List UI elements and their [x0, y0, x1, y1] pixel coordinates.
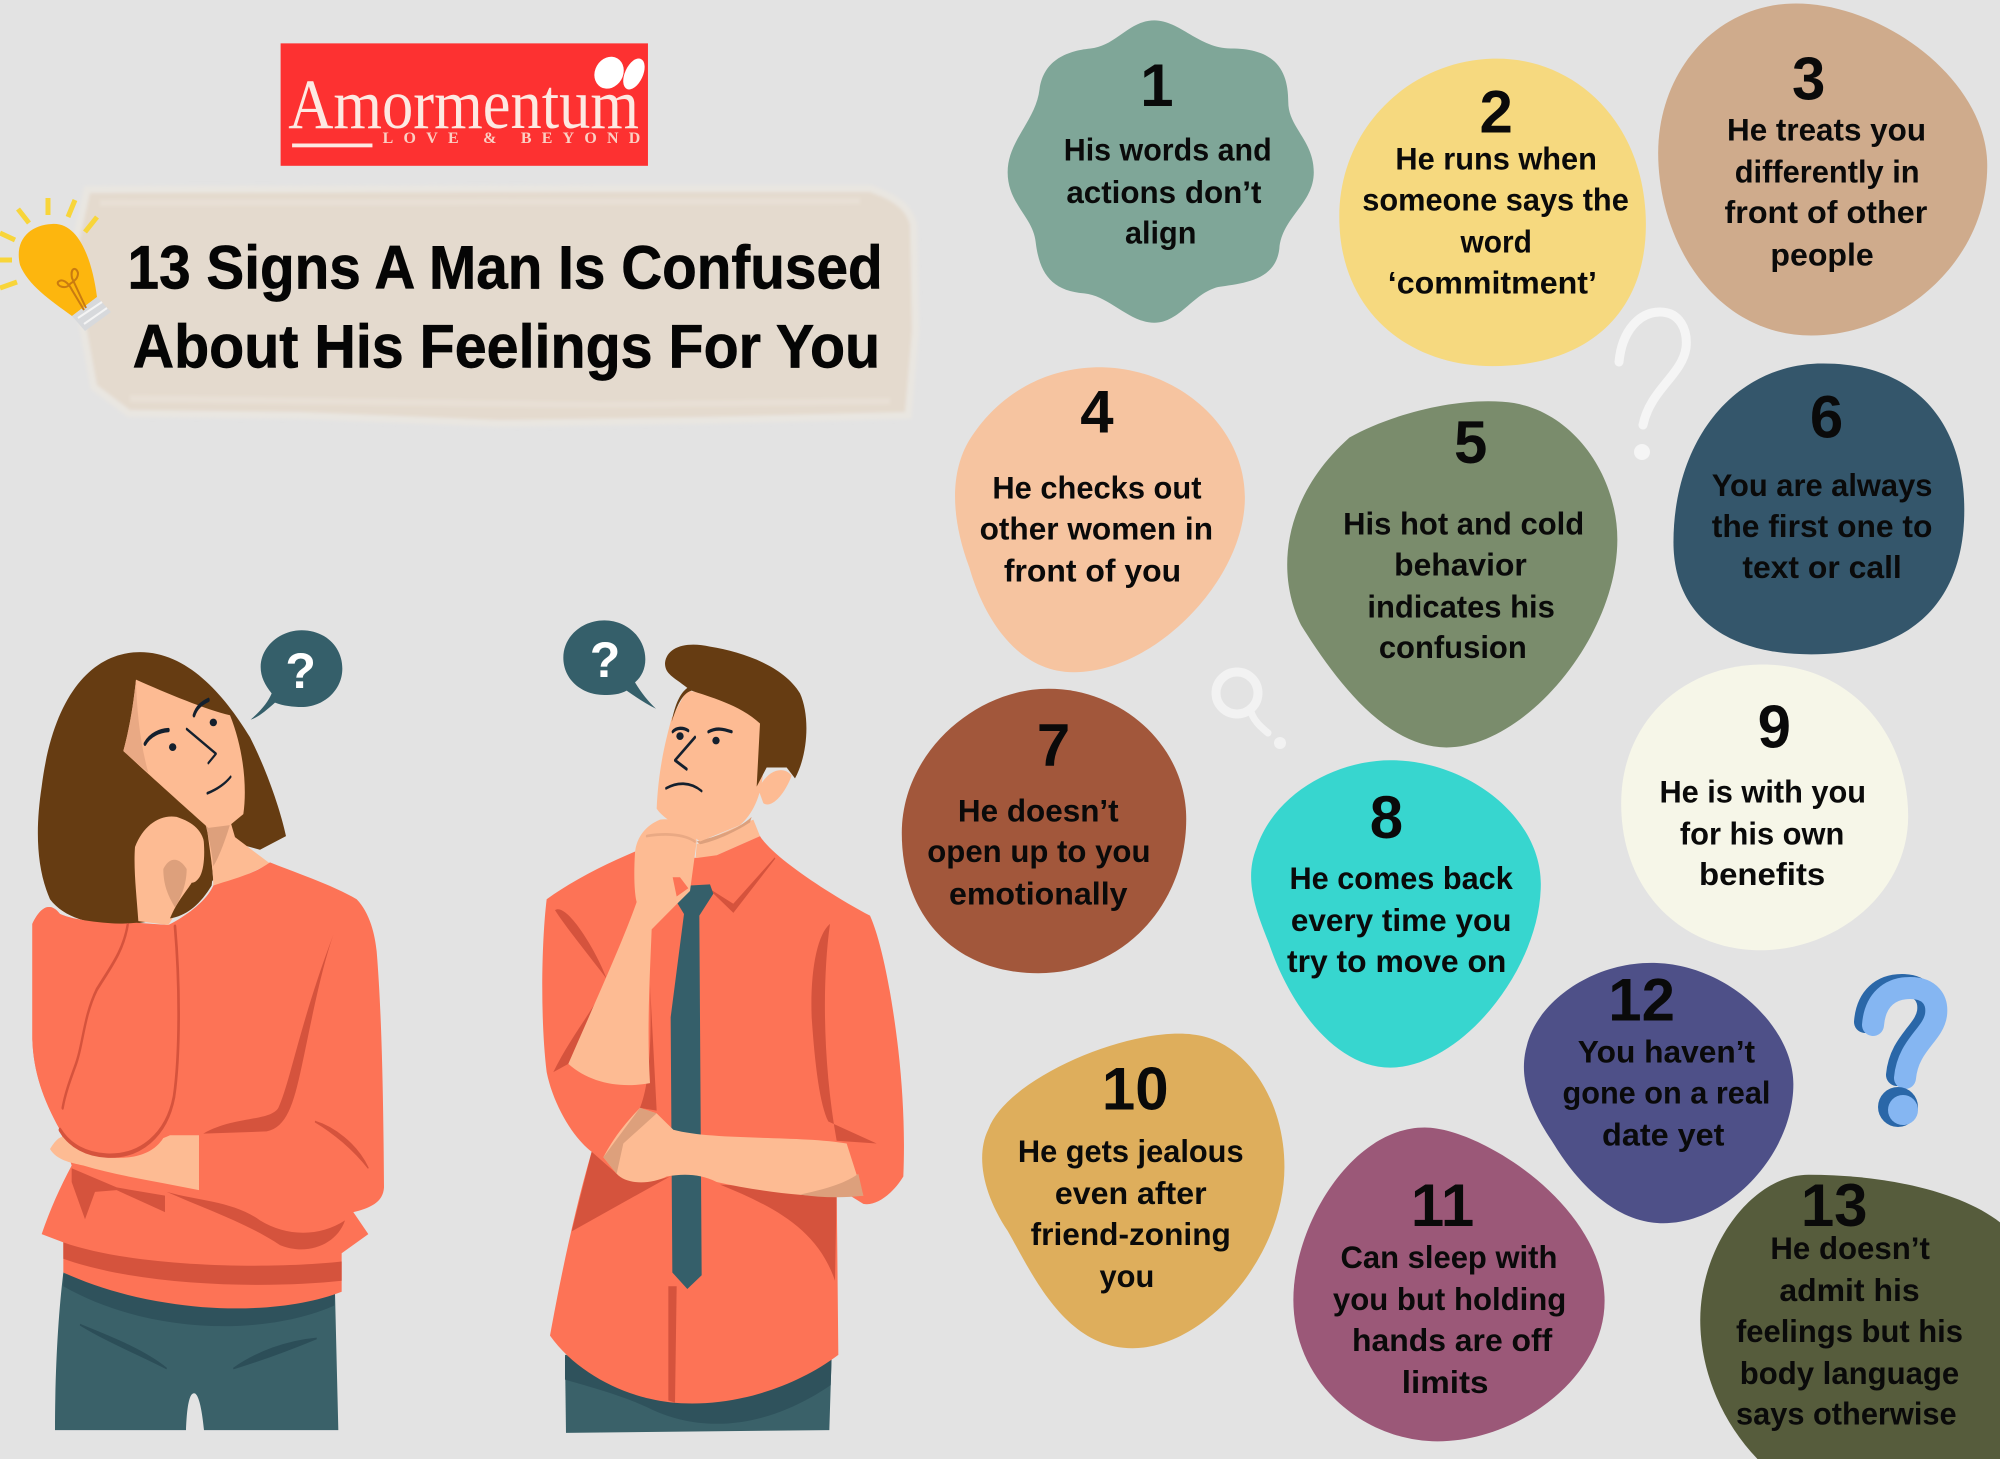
title brush banner: [75, 192, 912, 420]
logo hearts icon: [589, 51, 649, 94]
sign 7: [902, 689, 1186, 973]
man speech bubble with question mark: [563, 620, 656, 709]
sign 13: feelings but his: [1736, 1313, 1963, 1349]
sign 7: open up to you: [927, 833, 1151, 869]
sign 5: confusion: [1379, 629, 1527, 665]
man face: [657, 691, 763, 842]
sign 7: He doesn’t: [958, 792, 1119, 828]
sign 9: He is with you: [1659, 773, 1866, 809]
woman hand: [135, 816, 206, 925]
sign 10: [982, 1034, 1284, 1348]
sign 2: [1339, 59, 1646, 366]
sign 5: 5: [1454, 409, 1487, 476]
sign 4: 4: [1080, 378, 1114, 445]
woman sleeve: [32, 907, 178, 1158]
sign 11: 11: [1411, 1172, 1474, 1239]
sign 8: He comes back: [1290, 860, 1513, 896]
logo wordmark: Amormentum: [288, 65, 639, 144]
sign 9: [1621, 665, 1908, 950]
sign 5: His hot and cold: [1343, 505, 1584, 541]
sign 11: Can sleep with: [1341, 1239, 1557, 1275]
sign 4: He checks out: [992, 470, 1202, 506]
woman thinking illustration: [32, 630, 384, 1430]
sign 13: He doesn’t: [1770, 1230, 1930, 1266]
sign 4: other women in: [980, 511, 1213, 547]
sign 13: 13: [1801, 1172, 1868, 1239]
sign 5: [1287, 401, 1617, 747]
sign 2: ‘commitment’: [1388, 264, 1597, 300]
sign 9: 9: [1758, 693, 1791, 760]
sign 12: gone on a real: [1562, 1074, 1770, 1110]
sign 2: someone says the: [1362, 181, 1629, 217]
sign 9: for his own: [1680, 815, 1844, 851]
sign 10: you: [1099, 1258, 1154, 1294]
man facial features: [666, 728, 732, 791]
sign 3: [1658, 3, 1987, 335]
woman neck: [207, 822, 270, 885]
sign 12: date yet: [1602, 1116, 1725, 1152]
woman sweater folds: [60, 925, 368, 1285]
woman speech bubble with question mark: [251, 630, 342, 720]
sign 5: indicates his: [1367, 588, 1555, 624]
sign 1: actions don’t: [1066, 174, 1262, 210]
man folded arm: [603, 1108, 863, 1197]
light bulb icon: [0, 198, 111, 331]
woman hair back: [38, 652, 286, 925]
sign 13: body language: [1740, 1355, 1959, 1391]
sign 8: try to move on: [1287, 943, 1506, 979]
woman sweater: [32, 862, 384, 1308]
logo: [281, 43, 649, 166]
sign 11: limits: [1402, 1364, 1489, 1400]
woman speech bubble with question mark: ?: [285, 643, 316, 699]
man raised arm and hand: [568, 819, 697, 1085]
title: 13 Signs A Man Is Confused: [128, 233, 883, 301]
man thinking illustration: [542, 620, 904, 1433]
sign 10: 10: [1102, 1056, 1169, 1123]
sign 3: 3: [1792, 45, 1825, 112]
man shirt shading and folds: [553, 858, 877, 1403]
sign 13: [1700, 1172, 2000, 1459]
sign 12: [1524, 963, 1793, 1223]
sign 10: friend-zoning: [1031, 1216, 1231, 1252]
logo underline: [292, 143, 372, 147]
sign 11: [1293, 1128, 1605, 1441]
title: About His Feelings For You: [133, 312, 880, 380]
blue 3D question mark: [1865, 985, 1936, 1127]
title: [128, 233, 883, 380]
sign 3: people: [1770, 236, 1874, 272]
sign 8: [1251, 760, 1541, 1068]
sign 3: differently in: [1735, 153, 1920, 189]
sign 2: He runs when: [1395, 141, 1597, 177]
sign 10: even after: [1055, 1175, 1207, 1211]
woman hair strand: [170, 836, 212, 918]
sign 12: 12: [1608, 966, 1675, 1033]
man hair: [665, 645, 806, 787]
sign 6: text or call: [1742, 549, 1902, 585]
sign 6: 6: [1810, 383, 1843, 450]
sign 6: [1673, 363, 1964, 654]
sign 1: His words and: [1064, 132, 1272, 168]
woman facial features: [145, 700, 231, 793]
woman pants: [55, 1273, 338, 1430]
sign 6: the first one to: [1712, 508, 1932, 544]
sign 6: You are always: [1712, 467, 1932, 503]
decorative white question mark: [1619, 312, 1686, 460]
woman face: [123, 680, 245, 828]
sign 11: hands are off: [1352, 1322, 1553, 1358]
sign 13: says otherwise: [1736, 1396, 1957, 1432]
man speech bubble with question mark: ?: [590, 632, 620, 688]
sign 1: align: [1125, 215, 1196, 251]
logo tagline: LOVE & BEYOND: [383, 130, 640, 147]
sign 9: benefits: [1699, 856, 1825, 892]
man ear: [758, 770, 792, 805]
man neck: [693, 820, 760, 888]
sign 4: [955, 367, 1245, 672]
sign 7: 7: [1037, 711, 1070, 778]
sign 13: admit his: [1779, 1272, 1920, 1308]
man pants: [565, 1355, 832, 1433]
man tie: [671, 884, 713, 1289]
sign 5: behavior: [1394, 546, 1527, 582]
sign 8: 8: [1370, 784, 1403, 851]
sign 3: front of other: [1724, 194, 1927, 230]
woman forearm: [50, 1135, 199, 1190]
decorative small question mark: [1216, 672, 1286, 749]
sign 12: You haven’t: [1578, 1033, 1755, 1069]
sign 1: [1008, 20, 1314, 323]
sign 10: He gets jealous: [1018, 1133, 1244, 1169]
sign 3: He treats you: [1727, 111, 1926, 147]
sign 11: you but holding: [1333, 1281, 1566, 1317]
man shirt: [542, 836, 904, 1404]
sign 7: emotionally: [949, 875, 1128, 911]
sign 4: front of you: [1004, 553, 1181, 589]
sign 8: every time you: [1291, 902, 1511, 938]
sign 1: 1: [1140, 52, 1174, 119]
sign 2: word: [1460, 224, 1532, 260]
sign 2: 2: [1480, 79, 1513, 146]
